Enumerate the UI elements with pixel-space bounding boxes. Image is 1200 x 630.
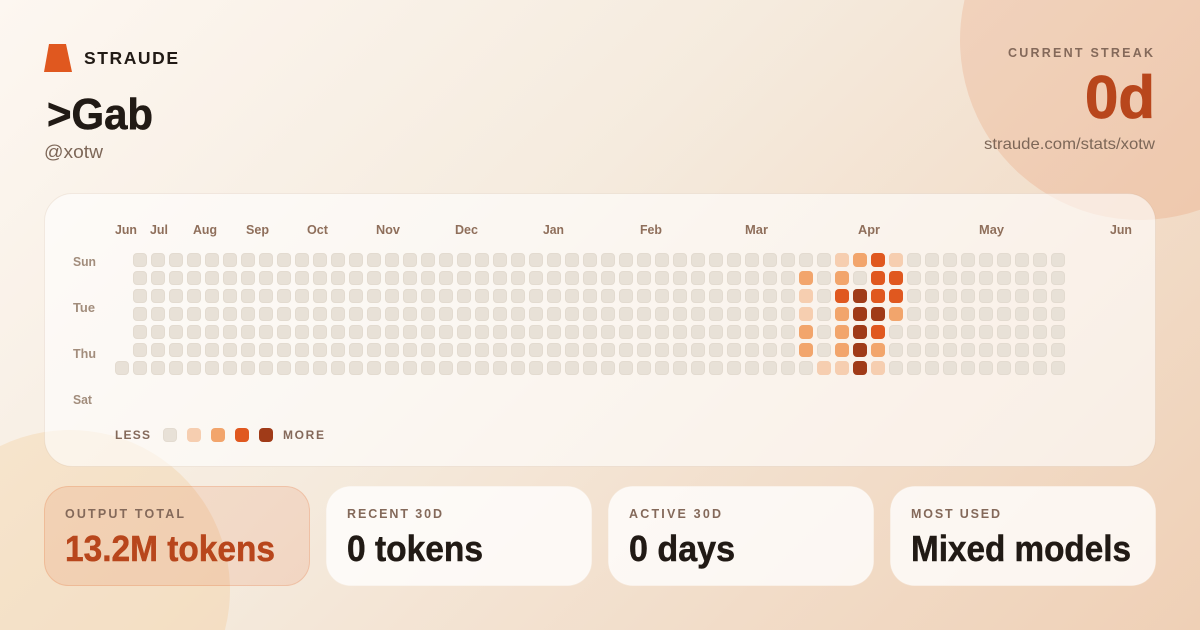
brand name: STRAUDE xyxy=(84,48,178,68)
handle: @xotw xyxy=(44,142,104,162)
weekday labels xyxy=(73,255,96,407)
stat card: output total: 13.2M tokens xyxy=(65,528,275,569)
stat card: most used: MOST USED xyxy=(911,507,1000,521)
stat card: active 30d: ACTIVE 30D xyxy=(629,507,721,521)
panel: activity heatmap xyxy=(44,194,1156,466)
title: display name: >Gab xyxy=(47,90,153,139)
weekday labels: Sat xyxy=(73,393,93,407)
month labels: Mar xyxy=(745,223,768,237)
legend: LESS xyxy=(115,428,150,442)
month labels: Aug xyxy=(193,223,217,237)
stat card: most used xyxy=(890,486,1156,586)
icon: straude logo xyxy=(44,44,72,72)
month labels: Feb xyxy=(640,223,662,237)
current streak block xyxy=(984,46,1155,153)
decorative circle: bottom left xyxy=(0,430,230,630)
weekday labels: Tue xyxy=(73,301,95,315)
stat card: recent 30d: 0 tokens xyxy=(347,528,483,569)
decorative circle: top right xyxy=(960,0,1200,220)
stat card: active 30d xyxy=(608,486,874,586)
heatmap grid xyxy=(115,253,1069,375)
month labels: Dec xyxy=(455,223,478,237)
stat card: recent 30d xyxy=(326,486,592,586)
stat card: recent 30d: RECENT 30D xyxy=(347,507,442,521)
stat card: output total: OUTPUT TOTAL xyxy=(65,507,184,521)
month labels xyxy=(115,223,1132,237)
month labels: Nov xyxy=(376,223,400,237)
weekday labels: Sun xyxy=(73,255,96,269)
stat card: output total xyxy=(44,486,310,586)
streak label: CURRENT STREAK xyxy=(1008,46,1153,60)
weekday labels: Thu xyxy=(73,347,96,361)
panel background xyxy=(44,194,1156,466)
month labels: Jun xyxy=(1110,223,1132,237)
month labels: May xyxy=(979,223,1004,237)
month labels: Sep xyxy=(246,223,269,237)
brand header xyxy=(44,44,178,72)
month labels: Jun xyxy=(115,223,137,237)
stat card: most used: Mixed models xyxy=(911,528,1131,569)
stat card: active 30d: 0 days xyxy=(629,528,735,569)
legend: MORE xyxy=(283,428,324,442)
month labels: Oct xyxy=(307,223,329,237)
month labels: Apr xyxy=(858,223,880,237)
legend xyxy=(115,428,324,442)
streak value: 0d xyxy=(1085,64,1155,131)
profile url: straude.com/stats/xotw xyxy=(984,136,1155,153)
month labels: Jan xyxy=(543,223,564,237)
month labels: Jul xyxy=(150,223,168,237)
